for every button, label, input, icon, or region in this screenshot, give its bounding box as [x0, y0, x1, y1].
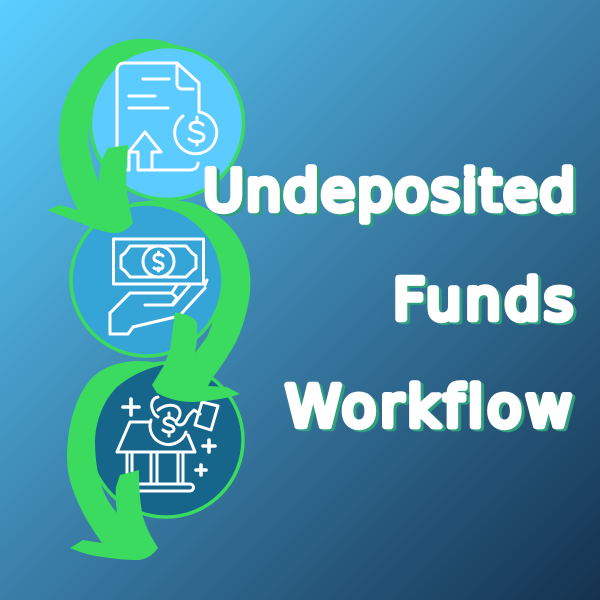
circle: cash in hand step [71, 204, 223, 356]
icon: invoice with upload arrow [117, 63, 217, 170]
title line: Undeposited: Undeposited [203, 159, 575, 224]
title line: Funds: Funds [396, 270, 576, 335]
title line: Funds: Funds [393, 268, 573, 333]
arrow: third step [67, 361, 162, 560]
arrow: first step [47, 39, 180, 233]
circle: bank step [89, 363, 243, 517]
title line: Undeposited: Undeposited [206, 161, 578, 226]
icon: cash in hand [110, 239, 207, 334]
circle: invoice step [90, 46, 244, 200]
title line: Workflow: Workflow [286, 375, 572, 440]
icon: bank with deposit [117, 397, 218, 491]
arrow: second step [130, 200, 250, 402]
title [203, 159, 578, 442]
title line: Workflow: Workflow [288, 377, 574, 442]
